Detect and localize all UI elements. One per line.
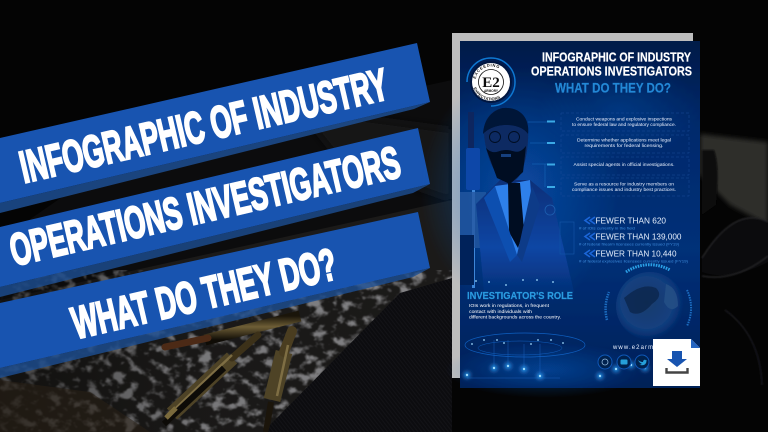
poster logo: EXPECTATIONS — [474, 87, 500, 100]
duty 2 — [577, 138, 671, 148]
statistics: # of federal explosives licensees currently issued (FY19) — [579, 260, 688, 264]
duty 1 — [572, 116, 676, 127]
banner 3 — [0, 212, 430, 378]
bullet: diagonal cartridge — [164, 335, 258, 424]
statistics: # of IOIs currently in the field — [579, 226, 635, 230]
role description: different backgrounds across the country. — [469, 314, 561, 320]
duty 4: compliance issues and industry best practices. — [572, 187, 676, 192]
icon: whatsapp — [598, 355, 612, 369]
duty 2: requirements for federal licensing. — [584, 143, 664, 148]
website address: www.e2armory.com — [612, 345, 683, 351]
pistol grip — [268, 278, 452, 432]
banner 1 — [0, 43, 430, 213]
right side smudges — [700, 134, 768, 225]
duty 4 — [572, 182, 676, 192]
banner 1 heading: INFOGRAPHIC OF INDUSTRY — [15, 58, 393, 193]
folded corner — [691, 339, 700, 348]
statistics: FEWER THAN 620 — [596, 216, 666, 226]
poster shadow frame — [452, 33, 693, 378]
duty 4: Serve as a resource for industry members on — [574, 182, 674, 186]
icon: download arrow — [666, 351, 688, 372]
role description — [469, 303, 561, 320]
statistics: FEWER THAN 139,000 — [596, 232, 682, 242]
icon: youtube — [617, 355, 631, 369]
stat chevrons — [585, 217, 595, 257]
duty 2: Determine whether applications meet legal — [577, 138, 671, 142]
duty 3: Assist special agents in official investigations. — [574, 162, 674, 167]
banner 2 — [0, 128, 430, 297]
suit badge — [545, 205, 555, 215]
poster title: INFOGRAPHIC OF INDUSTRY — [542, 50, 692, 64]
statistics — [579, 216, 688, 264]
duty connector ticks — [528, 120, 555, 188]
poster logo: EXCEEDING — [473, 64, 500, 79]
bullet: upright cartridge — [266, 331, 292, 432]
icon: twitter — [635, 355, 649, 369]
poster title: WHAT DO THEY DO? — [555, 80, 671, 96]
duty boxes — [561, 113, 689, 196]
role heading: INVESTIGATOR'S ROLE — [467, 291, 573, 302]
infographic poster — [427, 41, 700, 396]
poster title — [531, 50, 692, 96]
duty 1: Conduct weapons and explosive inspections — [576, 116, 673, 122]
globe graphic — [606, 265, 691, 340]
glowing circuit nodes — [464, 279, 648, 379]
duties list — [572, 116, 676, 192]
download badge — [653, 339, 700, 386]
poster title: OPERATIONS INVESTIGATORS — [531, 64, 692, 78]
role description: contact with individuals with — [469, 309, 532, 315]
rifle — [460, 112, 486, 288]
bullet: horizontal cartridge — [165, 316, 300, 347]
poster logo: ARMORY — [484, 89, 499, 93]
investigator figure with rifle — [460, 108, 574, 292]
banner 2 heading: OPERATIONS INVESTIGATORS — [5, 136, 405, 276]
statistics: FEWER THAN 10,440 — [596, 248, 677, 258]
statistics: # of federal firearm licensees currently issued (FY19) — [579, 242, 679, 246]
poster logo — [466, 57, 516, 107]
banner 3 heading: WHAT DO THEY DO? — [67, 238, 341, 349]
poster logo: E2 — [482, 75, 500, 91]
social icons — [598, 355, 649, 369]
duty 1: to ensure federal law and regulatory compliance. — [572, 122, 676, 127]
role description: IOIs work in regulations, in frequent — [469, 303, 550, 309]
